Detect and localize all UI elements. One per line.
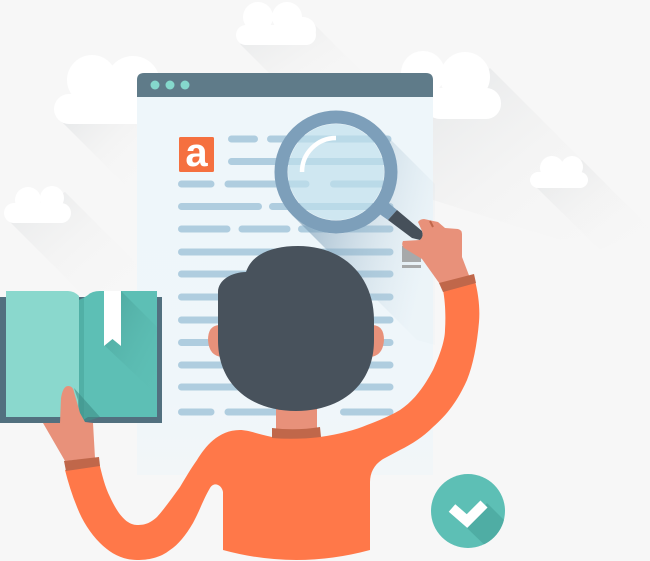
browser window — [137, 73, 433, 475]
window control dots — [150, 80, 190, 90]
check mark — [452, 504, 484, 521]
ears — [208, 325, 384, 357]
window body — [137, 90, 433, 475]
finger crease — [430, 221, 433, 227]
left cuff — [64, 457, 100, 471]
cloud: top right — [401, 51, 650, 240]
thumb shadow — [74, 388, 100, 424]
cloud: small right — [530, 156, 650, 250]
check badge — [431, 474, 505, 548]
handle — [388, 210, 423, 240]
left hand — [43, 386, 95, 461]
bookmark shadow — [105, 291, 140, 356]
logo — [179, 131, 214, 175]
logo: a — [185, 131, 208, 175]
back cover — [0, 297, 162, 423]
lens — [288, 124, 384, 220]
neck — [276, 400, 317, 432]
left page — [6, 291, 79, 417]
shirt — [65, 277, 479, 560]
magnifying glass — [281, 117, 423, 240]
check shadow — [467, 503, 504, 544]
gray tag — [402, 246, 421, 268]
window title bar — [137, 73, 433, 97]
right page — [79, 291, 157, 424]
magnifier long shadow — [292, 128, 435, 345]
collar — [272, 427, 321, 439]
cloud: small left — [4, 186, 137, 302]
cloud: top centre — [236, 2, 370, 104]
cloud: top left — [54, 55, 160, 197]
bookmark — [104, 291, 121, 346]
right cuff — [439, 274, 476, 292]
book — [0, 291, 162, 424]
right hand — [402, 219, 470, 287]
text lines — [182, 139, 390, 412]
spine shade — [79, 298, 84, 399]
neck — [378, 201, 397, 220]
hair — [218, 246, 374, 411]
glare — [302, 138, 336, 172]
ring — [281, 117, 391, 227]
